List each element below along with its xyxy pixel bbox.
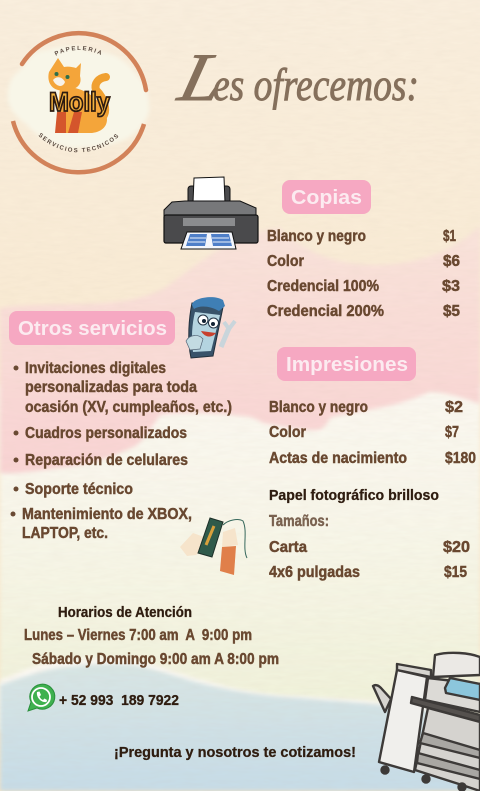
price list: impresiones: $180: [445, 450, 476, 467]
icon: office copier: [373, 653, 480, 791]
title: Les ofrecemos: es ofrecemos:: [213, 59, 419, 110]
price list: papel fotografico: Carta: [269, 539, 307, 556]
price list: copias: $5: [443, 303, 460, 320]
price list: impresiones: $7: [445, 424, 459, 441]
price list: copias: Color: [267, 253, 304, 270]
price list: impresiones: Actas de nacimiento: [269, 450, 407, 467]
button: Copias: [282, 180, 371, 214]
opening hours: Horarios de Atención: [58, 604, 192, 621]
logo wordmark: Molly: Molly: [49, 87, 110, 117]
price list: impresiones: Color: [269, 424, 306, 441]
price list: papel fotografico: $20: [443, 539, 470, 556]
button: Otros servicios: Otros servicios: [18, 318, 167, 340]
price list: impresiones: [269, 399, 476, 467]
icon: whatsapp: [28, 684, 55, 711]
opening hours: Lunes – Viernes 7:00 am A 9:00 pm: [24, 627, 252, 644]
price list: papel fotografico: $15: [444, 564, 467, 581]
list: otros servicios: Reparación de celulares: [25, 452, 188, 469]
logo curved text: papeleria: PAPELERIA: [54, 46, 101, 56]
list: otros servicios: Soporte técnico: [25, 481, 133, 498]
price list: copias: Credencial 200%: [267, 303, 384, 320]
price list: papel fotografico: Papel fotográfico brilloso: [269, 487, 439, 504]
button: Impresiones: [277, 347, 416, 381]
title: Les ofrecemos: L: [171, 39, 233, 115]
price list: papel fotografico: 4x6 pulgadas: [269, 564, 360, 581]
icon: printer: [164, 177, 258, 249]
list: otros servicios: Mantenimiento de XBOX,: [22, 506, 192, 523]
price list: copias: [267, 228, 460, 320]
opening hours: [24, 604, 279, 668]
list: otros servicios: [10, 360, 232, 542]
opening hours: Sábado y Domingo 9:00 am A 8:00 pm: [32, 651, 279, 668]
button: Impresiones: Impresiones: [286, 354, 408, 376]
icon: phone mascot with wrench: [186, 297, 235, 358]
closing call to action: ¡Pregunta y nosotros te cotizamos!: [114, 744, 356, 761]
logo: Molly papeleria: [8, 30, 149, 174]
price list: copias: $3: [442, 278, 460, 295]
logo curved text: servicios tecnicos: SERVICIOS TECNICOS: [38, 133, 118, 152]
price list: copias: $1: [443, 228, 456, 245]
list: otros servicios: LAPTOP, etc.: [22, 525, 108, 542]
icon: orange cat: [48, 58, 107, 133]
list: otros servicios: Invitaciones digitales: [25, 360, 166, 377]
button: Otros servicios: [9, 311, 175, 345]
icon: hands repairing circuit board: [180, 518, 247, 575]
list: otros servicios: Cuadros personalizados: [25, 425, 187, 442]
price list: impresiones: $2: [445, 399, 463, 416]
phone number: + 52 993 189 7922: [59, 692, 179, 709]
price list: impresiones: Blanco y negro: [269, 399, 368, 416]
price list: papel fotografico: Tamaños:: [269, 513, 329, 530]
logo ring upper arc: [22, 33, 146, 90]
logo white brush patch: [8, 46, 149, 148]
price list: copias: $6: [443, 253, 460, 270]
price list: copias: Credencial 100%: [267, 278, 379, 295]
logo ring lower arc: [13, 121, 144, 172]
price list: papel fotografico: [269, 487, 470, 581]
price list: copias: Blanco y negro: [267, 228, 366, 245]
list: otros servicios: ocasión (XV, cumpleaños, etc.): [25, 399, 232, 416]
list: otros servicios: personalizadas para toda: [25, 379, 197, 396]
button: Copias: Copias: [291, 187, 362, 209]
title: Les ofrecemos: [171, 39, 419, 115]
